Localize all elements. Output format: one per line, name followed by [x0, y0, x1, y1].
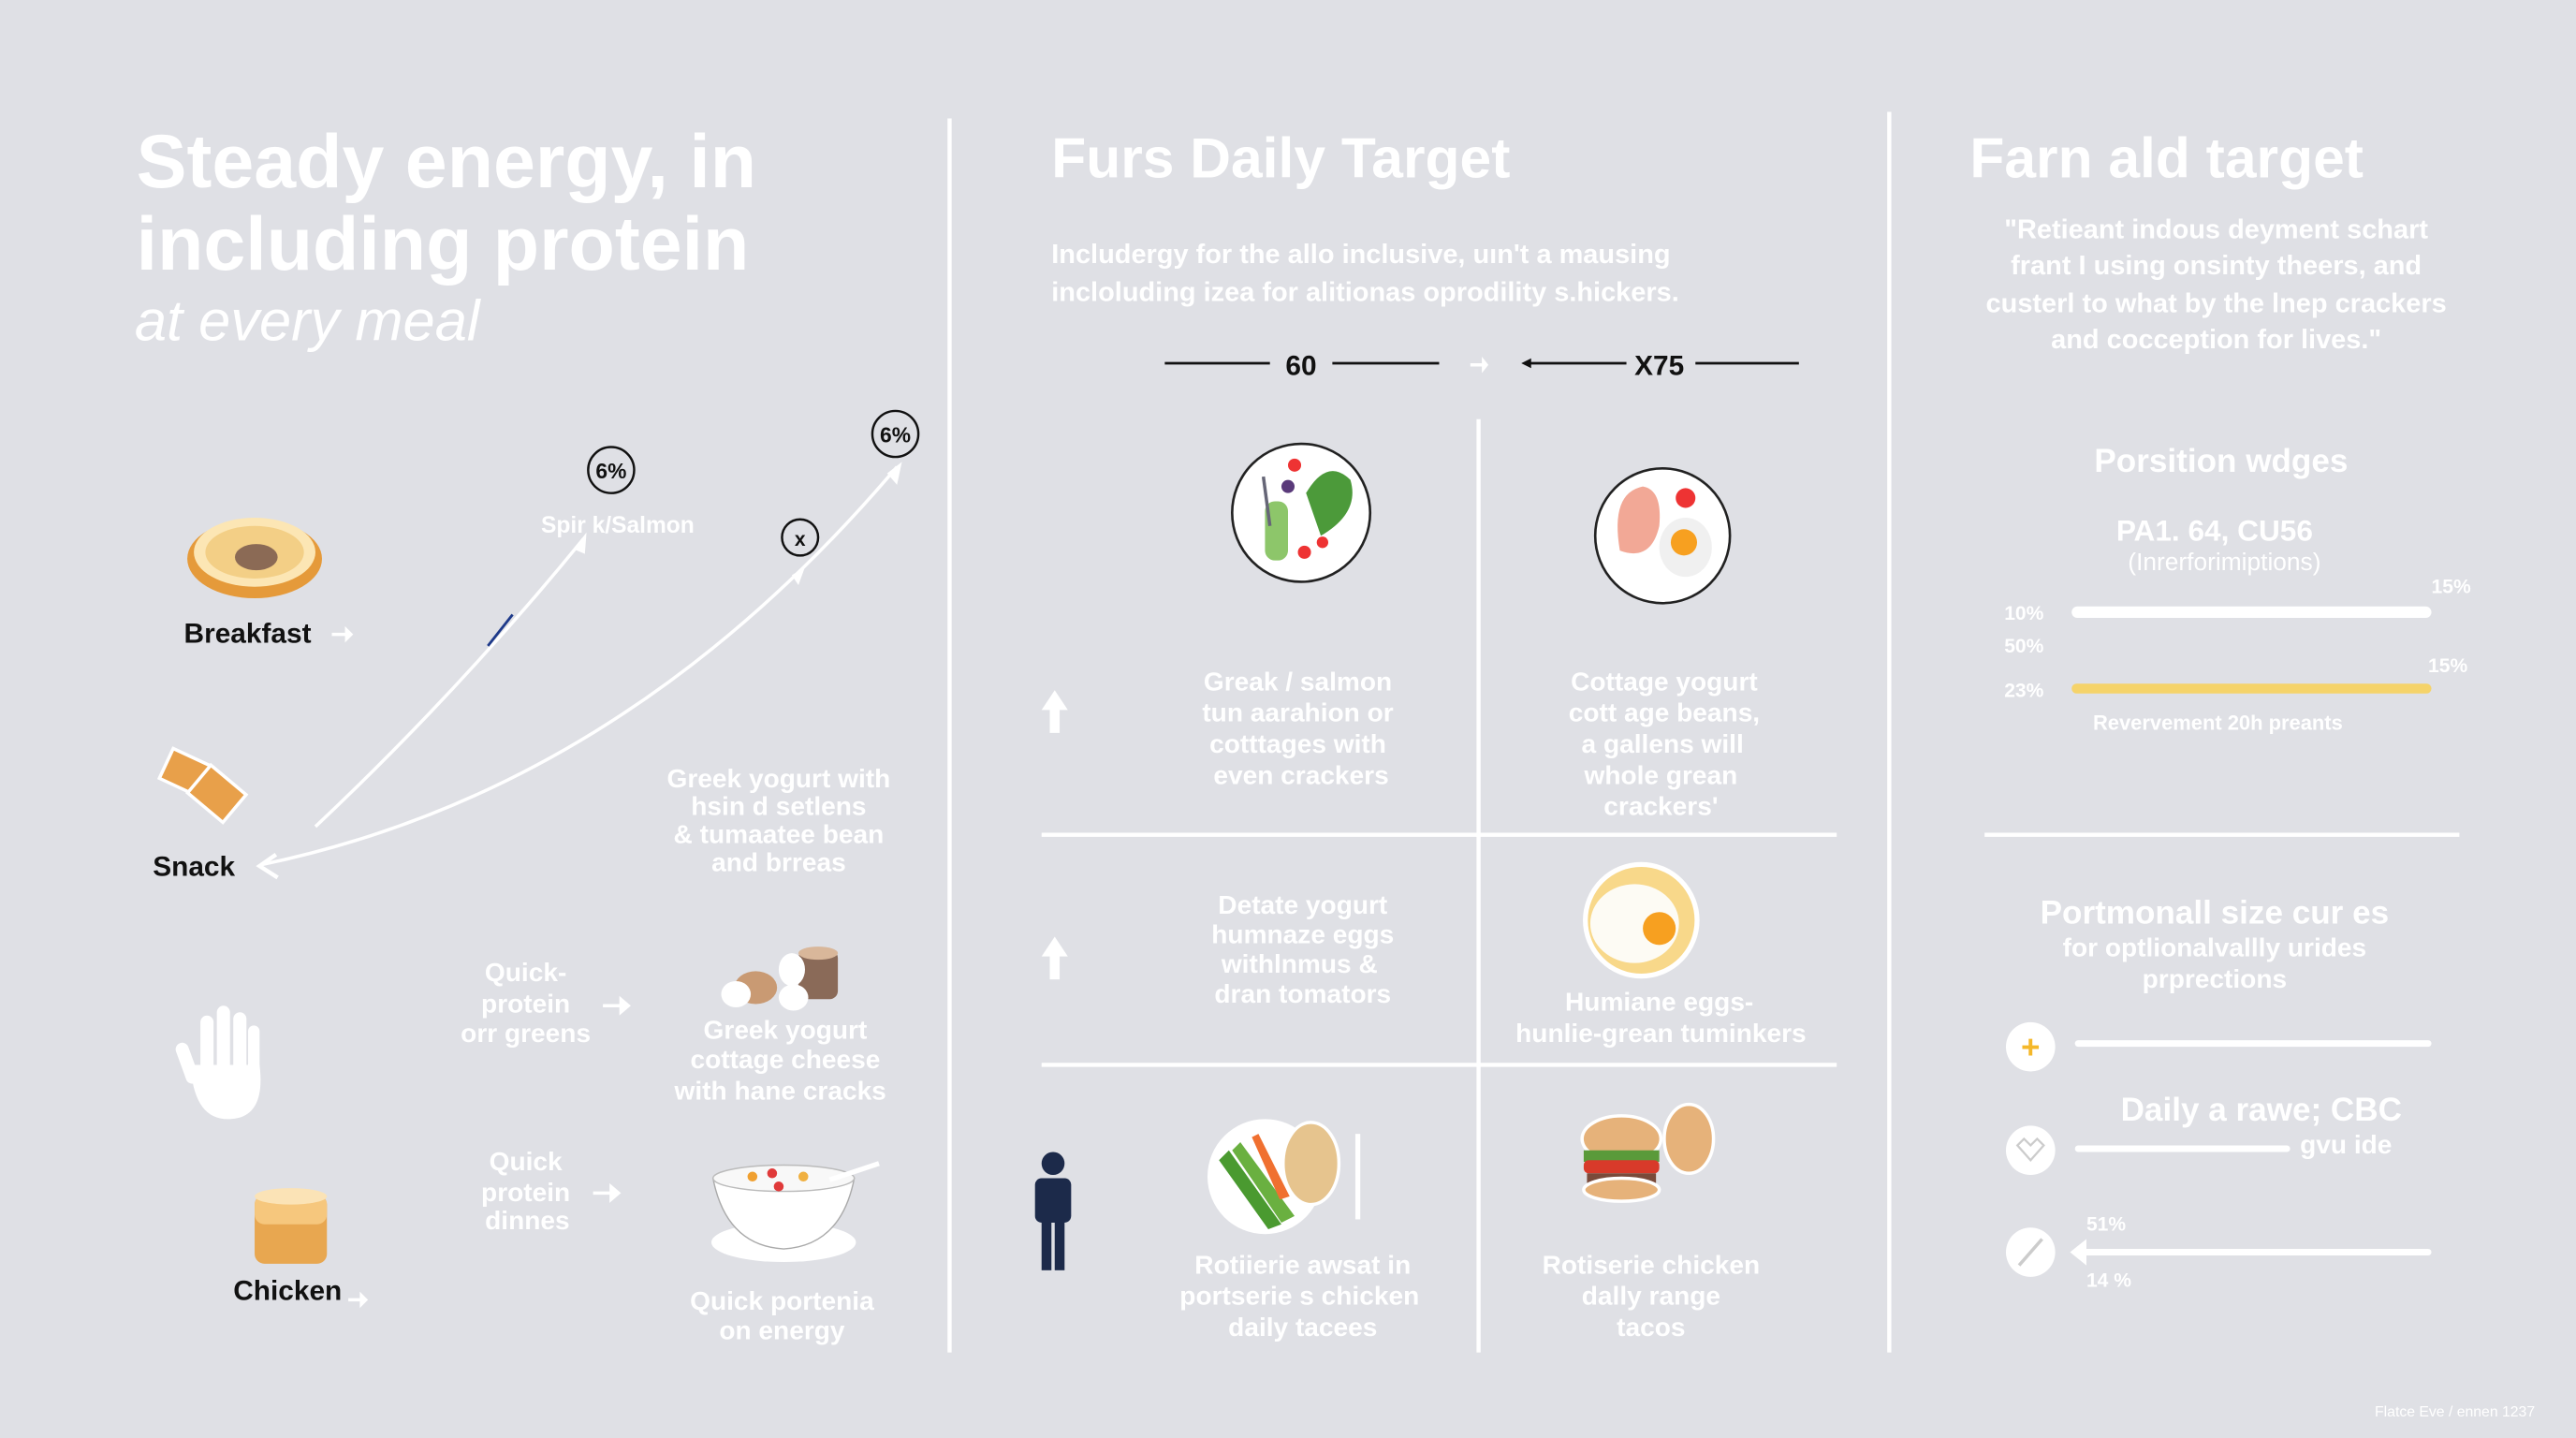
scale: 60 to X75: 60: [1285, 350, 1317, 381]
text: snack description: Greek yogurt with: [667, 764, 890, 793]
text: greak salmon: cotttages with: [1209, 729, 1386, 758]
icon: chicken cup: [255, 1188, 327, 1264]
scale: 60 to X75: X75: [1634, 350, 1684, 381]
text: quick protein dinners: protein: [481, 1178, 570, 1207]
text: quote: "Retieant indous deyment schart: [2004, 215, 2428, 245]
text: portmonall size: prprections: [2143, 964, 2287, 993]
footer: Flatce Eve / ennen 1237: [2375, 1404, 2535, 1420]
text: quick portenia: Quick portenia: [690, 1286, 874, 1315]
text: humiane eggs: [1515, 988, 1807, 1048]
text: quick protein dinners: dinnes: [485, 1206, 570, 1235]
chart: position wedges: 15%: [2432, 577, 2471, 598]
icon: veggie plate: [1208, 1119, 1360, 1234]
text: humiane eggs: Humiane eggs-: [1565, 988, 1753, 1017]
text: quick protein greens: [461, 958, 631, 1048]
text: middle subtitle: incloluding izea for alitionas oprodility s.hickers.: [1051, 277, 1679, 307]
text: detate yogurt: dran tomators: [1214, 979, 1391, 1008]
text: quick portenia: [690, 1286, 874, 1345]
text: detate yogurt: humnaze eggs: [1211, 920, 1394, 949]
title: left: including protein: [137, 202, 749, 286]
text: middle subtitle: Includergy for the allo inclusive, uın't a mausing: [1051, 240, 1671, 270]
chart: meal arcs: 6%: [595, 459, 626, 483]
text: rotiierie: daily tacees: [1228, 1313, 1377, 1342]
text: quote: frant I using onsinty theers, and: [2011, 251, 2422, 281]
chart: position wedges: 15%: [2428, 655, 2467, 677]
text: cottage yogurt: crackers': [1603, 792, 1719, 821]
text: cottage yogurt: a gallens will: [1582, 729, 1744, 758]
icon: breakfast plate: [187, 518, 322, 598]
chart: meal arcs: 6%: [880, 422, 911, 447]
text: quick protein dinners: [481, 1147, 621, 1235]
text: daily a rawe: Daily a rawe; CBC: [2121, 1092, 2402, 1128]
text: daily a rawe: [2121, 1092, 2402, 1159]
icon: plus: +: [2021, 1029, 2041, 1065]
text: snack description: [667, 764, 890, 876]
text: greak salmon: [1202, 667, 1394, 789]
text: portmonall size: for optlionalvallly urides: [2063, 933, 2366, 962]
chart: position wedges: 10%: [2004, 603, 2044, 624]
chart: position wedges: [2004, 443, 2471, 734]
scale: 60 to X75: [1164, 350, 1799, 381]
icon: hand: [174, 1005, 260, 1119]
text: quick protein dinners: Quick: [490, 1147, 563, 1176]
text: portmonall size: [2041, 895, 2389, 993]
text: detate yogurt: withlnmus &: [1221, 949, 1378, 978]
text: rotiserie chicken: tacos: [1617, 1313, 1686, 1342]
text: rotiserie chicken: Rotiserie chicken: [1543, 1250, 1760, 1279]
text: rotiierie: Rotiierie awsat in: [1194, 1250, 1411, 1279]
text: quote: custerl to what by the lnep crackers: [1986, 289, 2447, 319]
arrow: up 1: [1042, 690, 1068, 733]
arrow: percent range: 51%: [2086, 1214, 2126, 1236]
icon: heart check: [2006, 1125, 2056, 1175]
icon: snack crackers: [159, 748, 246, 822]
text: detate yogurt: Detate yogurt: [1218, 890, 1387, 919]
text: quick protein greens: Quick-: [485, 958, 566, 987]
text: detate yogurt: [1211, 890, 1394, 1008]
text: daily a rawe: gvu ide: [2300, 1130, 2392, 1159]
title: middle: Furs Daily Target: [1051, 126, 1510, 190]
title: left: Steady energy, in: [137, 120, 756, 204]
chart: position wedges: PA1. 64, CU56: [2116, 514, 2313, 548]
text: quick portenia: on energy: [719, 1316, 845, 1345]
chart: meal arcs: Spir k/Salmon: [541, 513, 695, 538]
chart: position wedges: Revervement 20h preants: [2093, 711, 2343, 734]
icon: bowl: [711, 1164, 879, 1262]
text: cottage yogurt: cott age beans,: [1569, 698, 1760, 727]
text: humiane eggs: hunlie-grean tuminkers: [1515, 1019, 1807, 1048]
text: greak salmon: even crackers: [1213, 760, 1389, 789]
label: snack: Snack: [153, 852, 236, 883]
text: snack description: hsin d setlens: [691, 792, 867, 821]
arrow: percent range: [2070, 1214, 2428, 1291]
text: quick protein greens: orr greens: [461, 1019, 591, 1048]
text: greak salmon: tun aarahion or: [1202, 698, 1394, 727]
arrow: up 2: [1042, 937, 1068, 979]
text: quote: [1986, 215, 2447, 355]
text: greek yogurt cottage cheese: Greek yogurt: [704, 1015, 867, 1044]
arrow: percent range: 14 %: [2086, 1269, 2131, 1291]
text: quick protein greens: protein: [481, 989, 570, 1018]
icon: eggs and stack: [721, 946, 838, 1011]
text: cottage yogurt: Cottage yogurt: [1571, 667, 1758, 696]
chart: position wedges: 50%: [2004, 636, 2044, 657]
text: rotiierie: [1179, 1250, 1419, 1342]
chart: position wedges: (Inrerforimiptions): [2128, 548, 2320, 576]
text: rotiserie chicken: [1543, 1250, 1760, 1342]
label: breakfast: Breakfast: [184, 618, 312, 649]
text: greek yogurt cottage cheese: cottage cheese: [690, 1045, 880, 1074]
icon: pencil: [2006, 1227, 2056, 1277]
text: middle subtitle: [1051, 240, 1679, 307]
icon: burger: [1582, 1105, 1714, 1201]
title: left: at every meal: [135, 288, 482, 353]
icon: salad plate: [1232, 444, 1370, 581]
text: greak salmon: Greak / salmon: [1204, 667, 1392, 696]
title: left: [135, 120, 756, 353]
label: chicken: Chicken: [233, 1275, 342, 1306]
icon: fried egg: [1586, 864, 1697, 976]
text: snack description: & tumaatee bean: [674, 820, 884, 849]
text: rotiserie chicken: dally range: [1582, 1282, 1720, 1311]
icon: ham egg plate: [1595, 468, 1730, 603]
text: cottage yogurt: whole grean: [1583, 760, 1737, 789]
chart: position wedges: 23%: [2004, 680, 2044, 701]
icon: person: [1035, 1152, 1071, 1270]
text: cottage yogurt: [1569, 667, 1760, 821]
text: portmonall size: Portmonall size cur es: [2041, 895, 2389, 932]
text: quote: and cocception for lives.": [2051, 325, 2381, 355]
chart: meal arcs: [259, 411, 918, 877]
icon: plus: [2006, 1022, 2056, 1071]
chart: meal arcs: x: [795, 529, 806, 550]
text: greek yogurt cottage cheese: [674, 1015, 886, 1105]
chart: position wedges: Porsition wdges: [2094, 443, 2348, 479]
title: right: Farn ald target: [1969, 126, 2364, 190]
text: snack description: and brreas: [711, 847, 846, 876]
text: rotiierie: portserie s chicken: [1179, 1282, 1419, 1311]
text: greek yogurt cottage cheese: with hane cracks: [674, 1076, 886, 1105]
